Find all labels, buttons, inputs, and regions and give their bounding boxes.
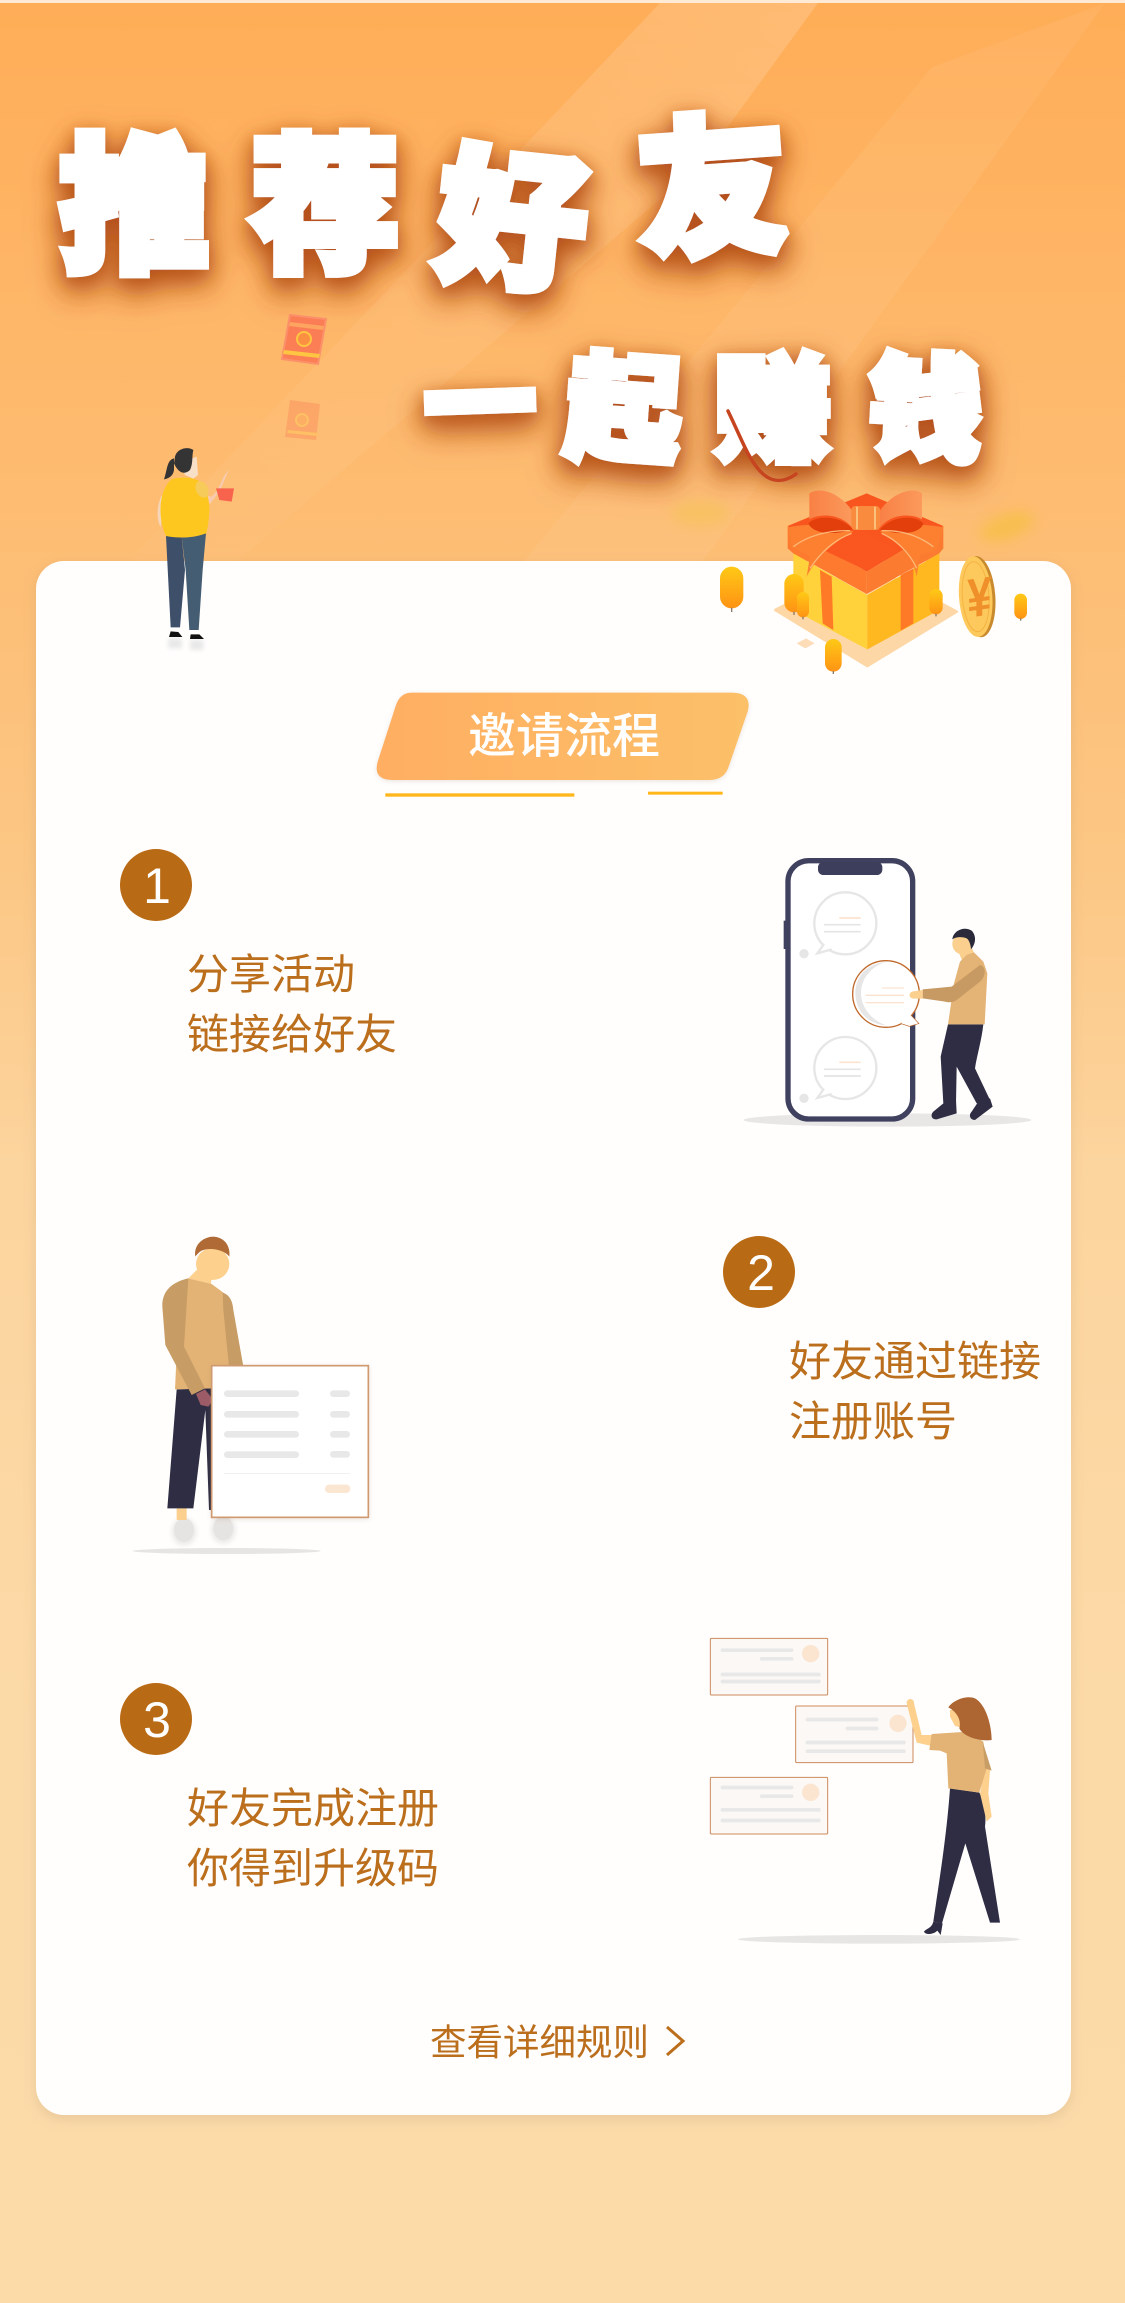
title: 推荐好友 (60, 101, 794, 313)
step 2 text (789, 1338, 1041, 1445)
step 2 text: 好友通过链接 (789, 1338, 1041, 1385)
title: 一起赚钱: 赚 (715, 346, 831, 476)
title: 推荐好友: 友 (632, 101, 794, 279)
person: woman (907, 1697, 1000, 1935)
chat bubble: held (853, 961, 919, 1027)
step 2 number: 2 (747, 1245, 775, 1301)
illustration: phone with chat bubbles (743, 861, 1031, 1127)
step 3 text (187, 1785, 439, 1892)
icon: coin: ¥ (967, 565, 992, 630)
icon: coin (956, 555, 998, 638)
step 3 text: 好友完成注册 (187, 1785, 439, 1832)
title: 一起赚钱: 一 (422, 342, 538, 471)
title: 推荐好友: 推 (60, 126, 208, 291)
red packet: far (285, 400, 320, 440)
step 1 number: 1 (143, 858, 171, 914)
person: man (910, 929, 993, 1120)
panel: white card (36, 561, 1071, 2115)
title: 一起赚钱: 钱 (865, 345, 985, 478)
step 2 number (723, 1236, 795, 1308)
red packet: near (282, 315, 326, 364)
illustration: man holding board (133, 1237, 368, 1554)
title: 一起赚钱: 起 (561, 342, 686, 480)
icon: lantern trees (720, 567, 1027, 674)
heading: 邀请流程 banner: 邀请流程 (468, 711, 660, 764)
title: 推荐好友: 好 (429, 134, 594, 313)
card: bottom (710, 1777, 828, 1834)
step 3 number: 3 (143, 1692, 171, 1748)
title: 推荐好友: 荐 (251, 126, 399, 291)
board (212, 1366, 368, 1517)
step 1 text (187, 951, 397, 1058)
step 1 number (120, 849, 192, 921)
chat bubble: bottom (799, 1037, 876, 1103)
step 1 text: 链接给好友 (187, 1011, 397, 1058)
step 3 number (120, 1683, 192, 1755)
heading: 邀请流程 banner (377, 693, 749, 797)
illustration: gift box with coin (670, 491, 1038, 674)
card: top (710, 1638, 828, 1695)
step 3 text: 你得到升级码 (187, 1845, 439, 1892)
chat bubble: top (799, 892, 876, 958)
link: view detailed rules: 查看详细规则 (430, 2022, 649, 2063)
illustration: woman with cards (710, 1638, 1020, 1944)
title: 一起赚钱 (422, 342, 985, 480)
illustration: woman throwing red packets (158, 448, 234, 650)
card: middle (796, 1706, 913, 1763)
ribbon squiggle (728, 411, 796, 480)
icon: chevron (667, 2027, 683, 2055)
step 1 text: 分享活动 (187, 951, 355, 998)
step 2 text: 注册账号 (789, 1398, 957, 1445)
